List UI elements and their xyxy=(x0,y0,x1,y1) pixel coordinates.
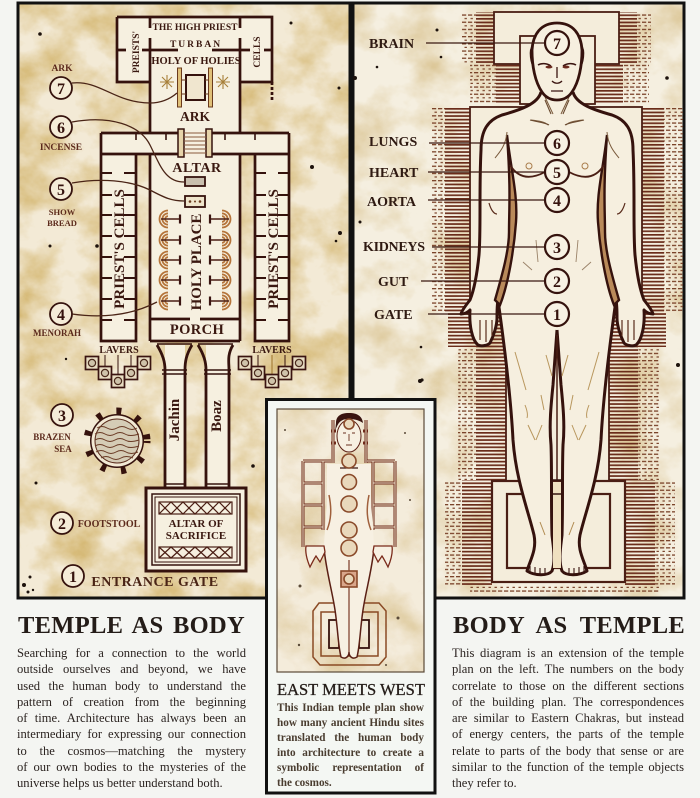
marker numerals: body: 7 xyxy=(553,36,561,53)
marker numerals: temple xyxy=(57,81,77,586)
temple labels: PRIEST'S CELLS xyxy=(112,189,128,309)
inset: chakras xyxy=(341,419,357,587)
temple labels: Jachin xyxy=(167,398,183,441)
text block: east meets west: into architecture to create a xyxy=(277,747,424,759)
text block: temple as body: Searching for a connection to the world xyxy=(17,646,246,660)
temple labels: CELLS xyxy=(253,36,263,68)
icon: left lavers xyxy=(86,355,150,388)
head xyxy=(532,23,582,100)
inset: plinth xyxy=(313,603,386,665)
number markers: body xyxy=(545,31,569,326)
temple labels xyxy=(33,23,292,590)
inset: arm and head frames xyxy=(303,420,395,547)
marker numerals: temple: 5 xyxy=(57,182,65,199)
body labels: AORTA xyxy=(367,195,417,210)
temple labels: MENORAH xyxy=(33,328,81,338)
text block: body as temple: similar to the function of the temple objects xyxy=(452,760,684,774)
text block: body as temple: This diagram is an extension of the temple xyxy=(452,646,684,660)
text block: temple as body: pattern of creation from the beginning xyxy=(17,695,246,709)
temple labels: ARK xyxy=(51,64,73,74)
body labels: GATE xyxy=(374,308,413,323)
temple labels: ARK xyxy=(180,109,210,124)
text block: east meets west: the cosmos. xyxy=(277,777,332,789)
icon: right lavers xyxy=(238,355,306,388)
icon: brazen sea xyxy=(87,411,147,471)
temple labels: Boaz xyxy=(209,400,225,432)
marker numerals: temple: 1 xyxy=(69,569,77,586)
inset: figure xyxy=(306,413,392,658)
marker numerals: body: 3 xyxy=(553,240,561,257)
text block: body as temple: of the building plan. The correspondences xyxy=(452,695,684,709)
altar of sacrifice xyxy=(146,488,246,571)
temple labels: PRIEST'S CELLS xyxy=(266,189,282,309)
text block: body as temple: plan on the left. The numbers on the body xyxy=(452,662,684,676)
marker numerals: body: 1 xyxy=(553,307,561,324)
marker numerals: body: 6 xyxy=(553,136,561,153)
temple labels: SEA xyxy=(54,444,72,454)
specks on parchment xyxy=(22,22,680,594)
label leader lines xyxy=(421,43,545,314)
text block: east meets west: symbolic representation of xyxy=(277,762,424,774)
icon: altar of incense xyxy=(185,177,205,186)
temple labels: INCENSE xyxy=(40,143,82,153)
text block: body as temple: relate to parts of the body that sense or are xyxy=(452,744,684,758)
text block: temple as body: used the human body to understand the xyxy=(17,678,246,692)
marker numerals: temple: 6 xyxy=(57,120,65,137)
body backdrop: hatching xyxy=(432,12,683,593)
connector lines to numbered labels xyxy=(72,83,184,316)
icons: menorahs xyxy=(160,210,230,310)
temple labels: ALTAR xyxy=(172,161,222,176)
text block: temple as body: of our own bodies to the mysteries of the xyxy=(17,760,246,774)
body labels: BRAIN xyxy=(369,37,414,52)
text block: temple as body: universe helps us better understand both. xyxy=(17,776,223,790)
altar crosshatch bands xyxy=(159,502,232,558)
body labels xyxy=(363,37,425,323)
temple labels: ALTAR OF xyxy=(169,518,224,530)
text block: body as temple: of energy centers, the parts of the temple xyxy=(452,727,684,741)
temple labels: BRAZEN xyxy=(33,432,71,442)
marker numerals: body: 4 xyxy=(553,193,561,210)
body labels: GUT xyxy=(378,275,409,290)
text block: temple as body: outside ourselves and beyond, we have xyxy=(17,662,246,676)
temple labels: SACRIFICE xyxy=(166,530,226,542)
body backdrop: table outlines xyxy=(470,12,642,582)
body labels: LUNGS xyxy=(369,135,417,150)
text block: temple as body xyxy=(17,646,246,790)
temple labels: TURBAN xyxy=(170,40,222,50)
number markers: temple xyxy=(50,77,84,587)
temple labels: BREAD xyxy=(47,218,77,228)
marker numerals: temple: 4 xyxy=(57,307,65,324)
centre line between legs xyxy=(553,482,561,568)
heading: east meets west: EAST MEETS WEST xyxy=(277,680,425,699)
text block: temple as body: of time. Architecture has always been an xyxy=(17,711,246,725)
temple labels: PREISTS' xyxy=(132,31,142,73)
icon: ark of the covenant xyxy=(160,68,230,107)
text block: body as temple xyxy=(452,646,684,790)
marker numerals: temple: 3 xyxy=(58,408,66,425)
gate steps between cross hall and holy place xyxy=(178,129,212,157)
panel: body figure parchment xyxy=(353,3,684,598)
temple labels: SHOW xyxy=(49,207,76,217)
temple labels: HOLY OF HOLIES xyxy=(151,56,241,67)
temple labels: PORCH xyxy=(170,322,224,338)
panel: east meets west inset xyxy=(266,400,435,793)
temple interior fills xyxy=(101,17,289,341)
marker numerals: temple: 7 xyxy=(57,81,65,98)
temple labels: ENTRANCE GATE xyxy=(91,575,219,590)
text block: temple as body: to the cosmos—matching the mystery xyxy=(17,744,246,758)
text block: body as temple: correlate to those on the different sections xyxy=(452,678,684,692)
temple labels: LAVERS xyxy=(99,345,139,356)
title: body as temple: BODY AS TEMPLE xyxy=(453,612,685,639)
body labels: KIDNEYS xyxy=(363,240,425,255)
specks on inset xyxy=(284,429,411,666)
temple labels: LAVERS xyxy=(252,345,292,356)
cross hall xyxy=(101,133,289,341)
temple labels: THE HIGH PRIEST xyxy=(152,23,238,33)
text block: east meets west: how many ancient Hindu sites xyxy=(277,717,424,729)
icon: show bread table xyxy=(185,196,205,207)
text block: east meets west: This Indian temple plan show xyxy=(277,702,424,714)
text block: temple as body: intermediary for expressing our connection xyxy=(17,727,246,741)
text block: body as temple: they refer to. xyxy=(452,776,517,790)
priest cell partitions xyxy=(101,173,289,320)
title: temple as body: TEMPLE AS BODY xyxy=(18,612,245,639)
marker numerals: temple: 2 xyxy=(58,516,66,533)
columns xyxy=(157,345,233,487)
marker numerals: body: 5 xyxy=(553,165,561,182)
body labels: HEART xyxy=(369,166,419,181)
temple labels: HOLY PLACE xyxy=(189,214,205,310)
outer walls of sanctuary xyxy=(117,17,272,133)
panel: temple plan parchment xyxy=(18,3,350,598)
marker numerals: body xyxy=(553,36,561,324)
text block: east meets west xyxy=(277,702,424,789)
text block: body as temple: are similar to Eastern Chakras, but instead xyxy=(452,711,684,725)
text block: east meets west: translated the human body xyxy=(277,732,424,744)
holy place lower wall and porch xyxy=(150,319,240,341)
temple floor plan xyxy=(101,17,289,571)
marker numerals: body: 2 xyxy=(553,274,561,291)
temple labels: FOOTSTOOL xyxy=(78,519,141,530)
human body figure xyxy=(461,23,653,575)
